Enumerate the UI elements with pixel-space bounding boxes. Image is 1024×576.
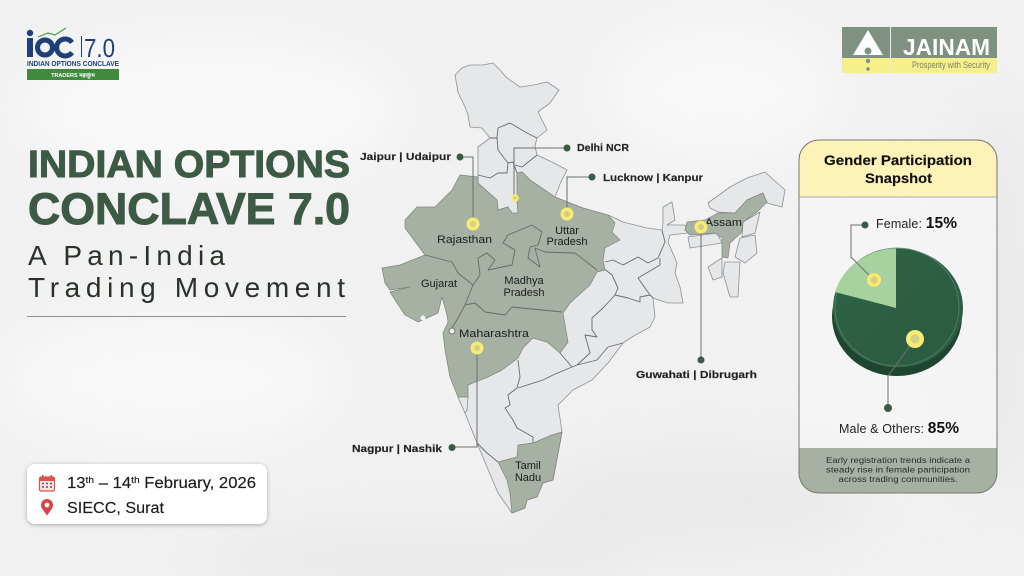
callout: Nagpur Nashik: [352, 342, 484, 455]
map labels: Assam: [705, 217, 742, 229]
callout: Guwahati Dibrugarh: [636, 220, 757, 381]
panel footnote: steady rise in female participation: [826, 466, 970, 474]
event details card: [27, 464, 267, 524]
panel footnote: across trading communities.: [838, 475, 958, 484]
subtitle: Trading Movement: [28, 272, 345, 303]
title: CONCLAVE 7.0: [28, 185, 350, 234]
map labels: Rajasthan: [437, 234, 492, 246]
map labels: Uttar: [555, 225, 579, 237]
logo: IOC 7.0: 7.0: [84, 33, 115, 63]
logo: IOC 7.0: TRADERS महाकुंभ: [51, 72, 96, 79]
callout: Nagpur Nashik: Nagpur | Nashik: [352, 443, 442, 455]
callout: female: Female: 15%: [876, 215, 957, 232]
logo: IOC 7.0: [27, 28, 119, 80]
panel heading: [824, 153, 972, 186]
callout: Delhi NCR: Delhi NCR: [577, 142, 629, 154]
map labels: Maharashtra: [459, 328, 530, 340]
callout: male and others: [839, 330, 959, 437]
panel footnote: [826, 456, 971, 484]
map labels: Pradesh: [547, 236, 587, 248]
callout: Lucknow Kanpur: Lucknow | Kanpur: [603, 172, 703, 184]
pie chart: [832, 248, 963, 376]
northeast states: [685, 172, 785, 297]
icon: calendar: [40, 475, 54, 491]
southern and eastern states: [458, 202, 688, 513]
title: [28, 144, 350, 234]
callout: Delhi NCR: [511, 142, 629, 202]
panel heading: Gender Participation: [824, 153, 972, 168]
map labels: Gujarat: [421, 278, 457, 290]
map labels: Madhya: [504, 275, 544, 287]
Assam: [685, 193, 767, 258]
logo: Jainam: [842, 27, 997, 73]
panel heading: Snapshot: [865, 171, 933, 186]
subtitle: [28, 240, 345, 303]
subtitle: A Pan-India: [28, 240, 225, 271]
icon: location pin: [41, 499, 53, 516]
map labels: Tamil: [515, 460, 541, 472]
Tamil Nadu: [498, 432, 562, 513]
northern states: [455, 63, 567, 220]
callout: Jaipur Udaipur: [360, 151, 480, 230]
venue: SIECC, Surat: [67, 500, 165, 517]
date: 13: [67, 475, 84, 492]
callout: female: [851, 215, 957, 287]
map of India: [382, 63, 785, 513]
map labels: Pradesh: [504, 287, 544, 299]
callout: male and others: Male & Others: 85%: [839, 420, 959, 437]
logo: Jainam: JAINAM: [903, 34, 990, 60]
logo: IOC 7.0: INDIAN OPTIONS CONCLAVE: [27, 61, 119, 68]
highlighted states: [382, 172, 620, 397]
map labels: Nadu: [515, 472, 541, 484]
callout: Jaipur Udaipur: Jaipur | Udaipur: [360, 151, 451, 163]
date: th: [131, 475, 140, 486]
date: th: [86, 475, 94, 486]
panel footnote: Early registration trends indicate a: [826, 456, 971, 465]
map labels: [421, 217, 742, 484]
callout: Guwahati Dibrugarh: Guwahati | Dibrugarh: [636, 369, 757, 381]
date: February, 2026: [140, 475, 256, 492]
logo: Jainam: Prosperity with Security: [912, 60, 990, 70]
panel: gender participation: [799, 140, 997, 493]
date: – 14: [94, 475, 132, 492]
title: INDIAN OPTIONS: [28, 144, 350, 186]
callout: Lucknow Kanpur: [560, 172, 703, 220]
